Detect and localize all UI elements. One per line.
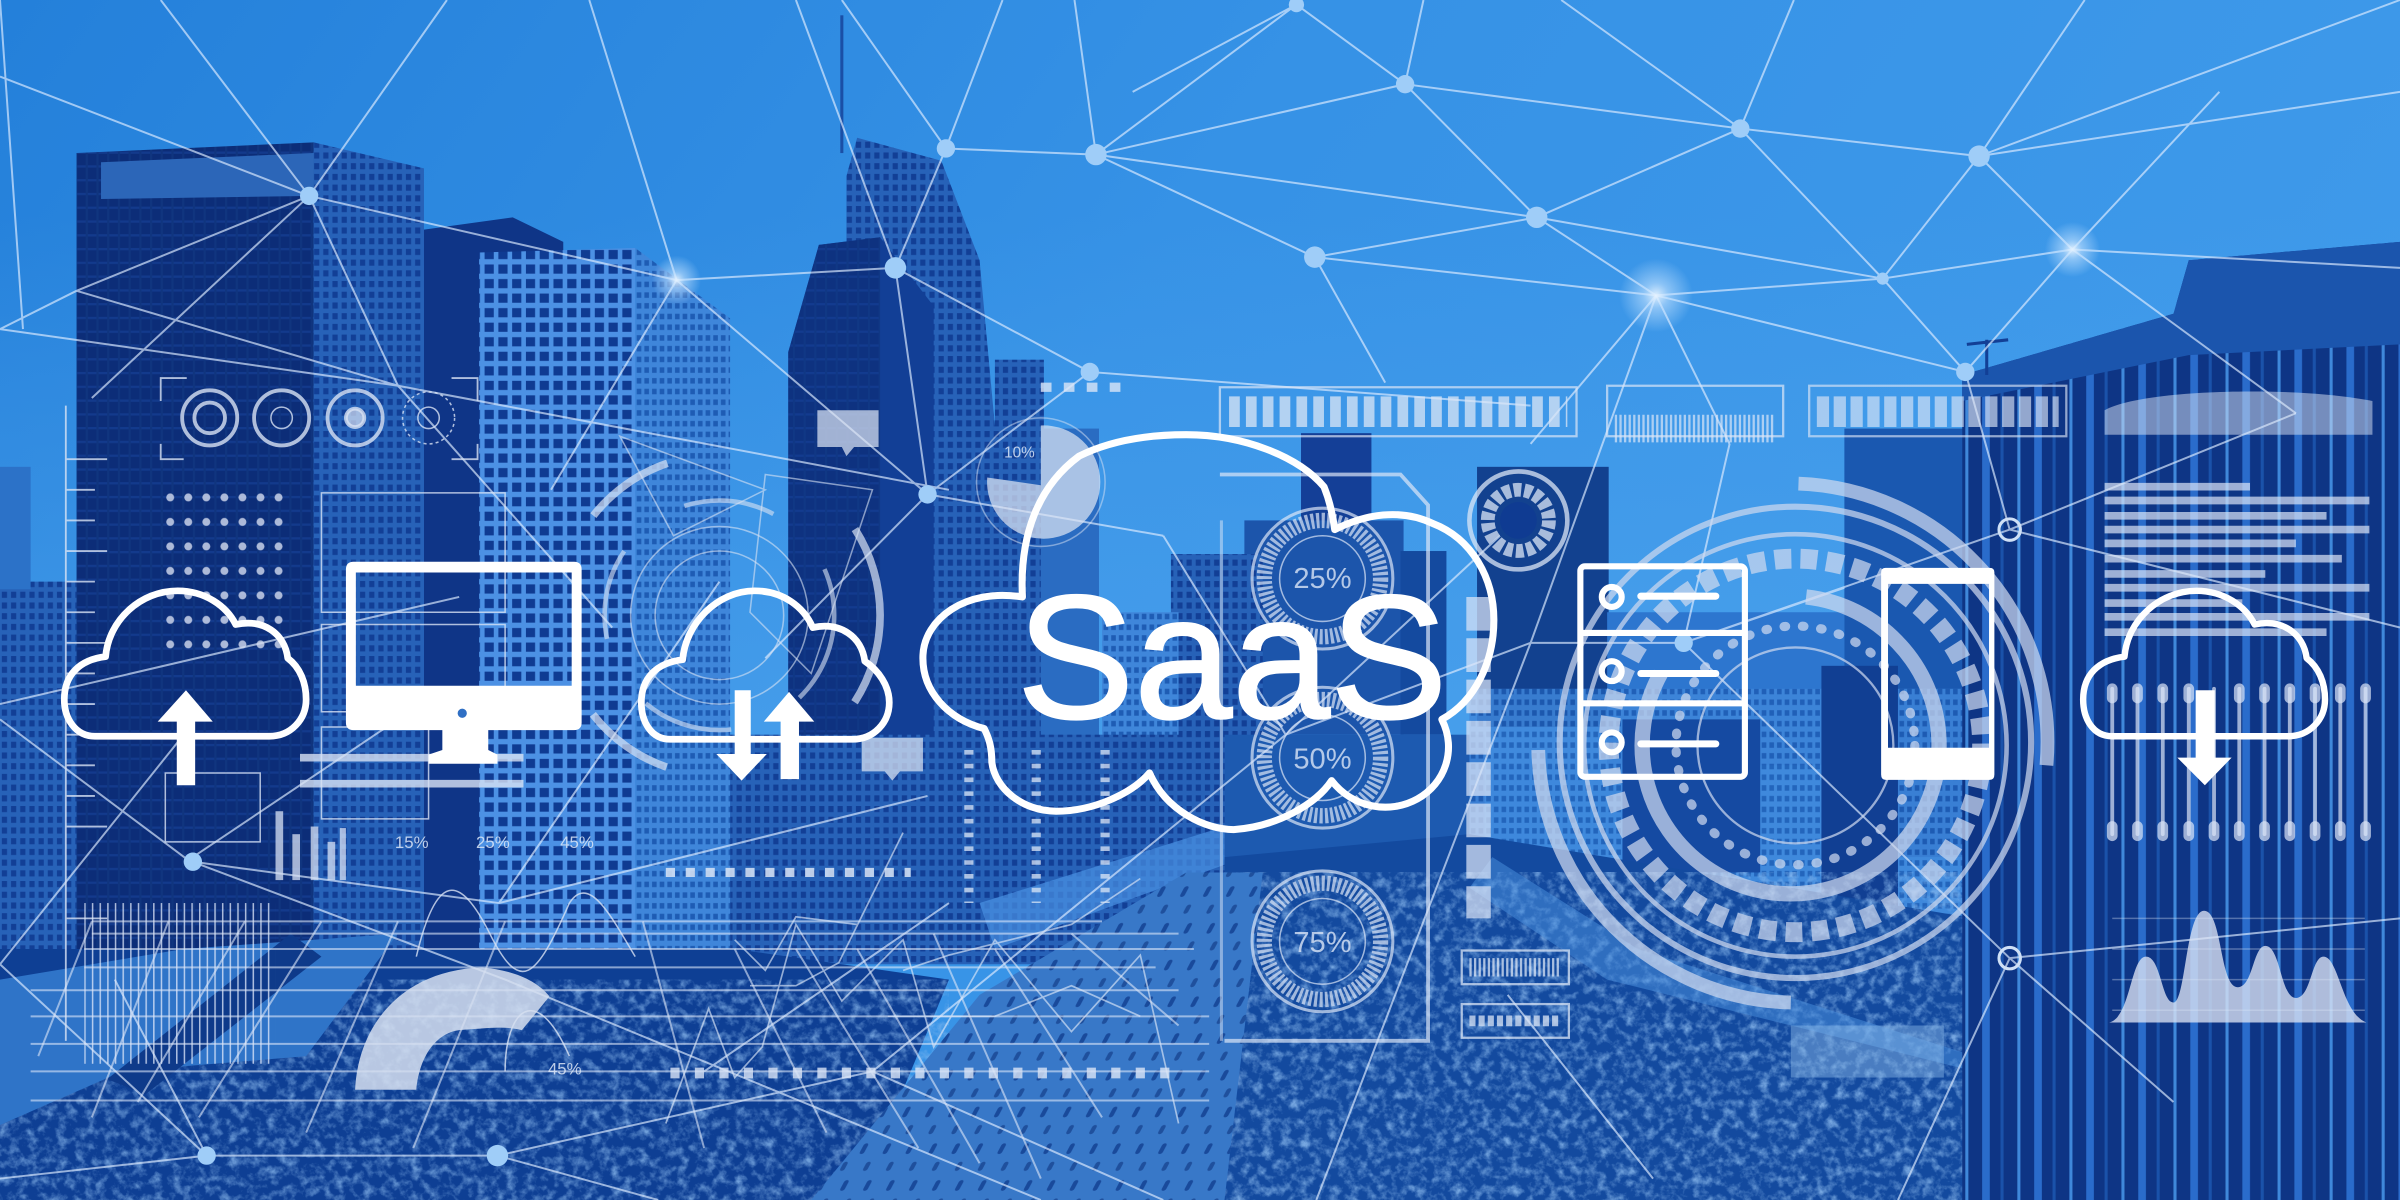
data boxes bbox=[165, 493, 505, 842]
tree texture bbox=[0, 980, 949, 1200]
window grid tower bbox=[479, 248, 635, 1010]
icon: cloud download bbox=[2083, 591, 2325, 785]
dashed ring bbox=[1609, 559, 1982, 932]
percent labels small: 25% bbox=[476, 833, 510, 852]
HUD overlays left bbox=[66, 378, 635, 1071]
right foreground building bbox=[1962, 242, 2400, 1200]
outer thick arcs bbox=[1798, 484, 2047, 765]
bracket corners bbox=[161, 378, 478, 459]
monitor caption bars bbox=[300, 758, 523, 784]
concentric HUD ring bbox=[1538, 484, 2047, 1003]
grid of horizontal lines bbox=[31, 921, 1209, 1179]
right bar list bbox=[2105, 391, 2372, 632]
gauge 75 percent bbox=[1252, 871, 1393, 1012]
highway bbox=[811, 872, 1263, 1200]
icon: cloud sync bbox=[641, 591, 889, 781]
small bar chart bbox=[276, 811, 346, 880]
scatter arcs bbox=[416, 890, 635, 1071]
icon: smartphone bbox=[1881, 568, 1994, 780]
icon: desktop monitor bbox=[346, 562, 582, 764]
percent labels small: 45% bbox=[548, 1059, 582, 1078]
speech bubbles bbox=[817, 410, 923, 781]
dashed progress bar bbox=[666, 869, 911, 875]
icon: SaaS cloud bbox=[923, 435, 1494, 830]
gauge 50 percent: 50% bbox=[1293, 743, 1352, 775]
dot matrix bbox=[161, 493, 288, 664]
column dashes under cloud bbox=[969, 750, 1105, 903]
thin ring bbox=[1560, 507, 2031, 978]
network nodes bbox=[184, 0, 2100, 1166]
city skyline bbox=[0, 15, 1967, 1010]
icon: cloud upload bbox=[64, 591, 306, 785]
percent labels small: 45% bbox=[560, 833, 594, 852]
icon: server rack bbox=[1580, 566, 1746, 777]
central distant buildings bbox=[1301, 433, 1371, 586]
gauges frame bbox=[1220, 474, 1428, 1041]
target circles bbox=[182, 390, 455, 445]
gauge 75 percent: 75% bbox=[1293, 927, 1352, 959]
dot ring bbox=[1676, 626, 1915, 865]
right parkland bbox=[1224, 834, 1974, 1200]
right slider columns bbox=[2112, 689, 2366, 836]
tall dark tower bbox=[77, 142, 314, 980]
plaza bbox=[0, 934, 398, 1125]
vertical lines chart bbox=[84, 903, 276, 1064]
distant left buildings bbox=[0, 582, 77, 980]
gauge arc bbox=[355, 967, 549, 1090]
gauge 25 percent bbox=[1252, 508, 1393, 649]
downtown twin towers bbox=[846, 138, 998, 796]
gauge 50 percent bbox=[1252, 687, 1393, 828]
percent labels small bbox=[395, 445, 1035, 1078]
vertical dashed bar bbox=[1471, 597, 1487, 918]
gear gauge bbox=[1469, 471, 1567, 569]
bold ring bbox=[1642, 597, 1939, 894]
radar panel near center left bbox=[559, 436, 880, 776]
ruler bbox=[66, 406, 107, 1041]
left parkland bbox=[0, 949, 949, 1200]
percent labels small: 10% bbox=[1004, 445, 1035, 462]
pie chart overlay bbox=[977, 418, 1105, 546]
mid-distance blocks bbox=[730, 735, 1235, 964]
SaaS label: SaaS bbox=[1017, 560, 1447, 756]
small meter panels bbox=[1462, 951, 1569, 1038]
right area chart bbox=[2109, 911, 2366, 1022]
line chart scribble bbox=[666, 833, 1179, 1123]
ground: trees and highway bbox=[0, 666, 1974, 1200]
gauge 25 percent: 25% bbox=[1293, 563, 1352, 595]
top segmented panels bbox=[1220, 386, 2066, 436]
percent labels small: 15% bbox=[395, 833, 429, 852]
middle dark tower bbox=[424, 217, 563, 980]
